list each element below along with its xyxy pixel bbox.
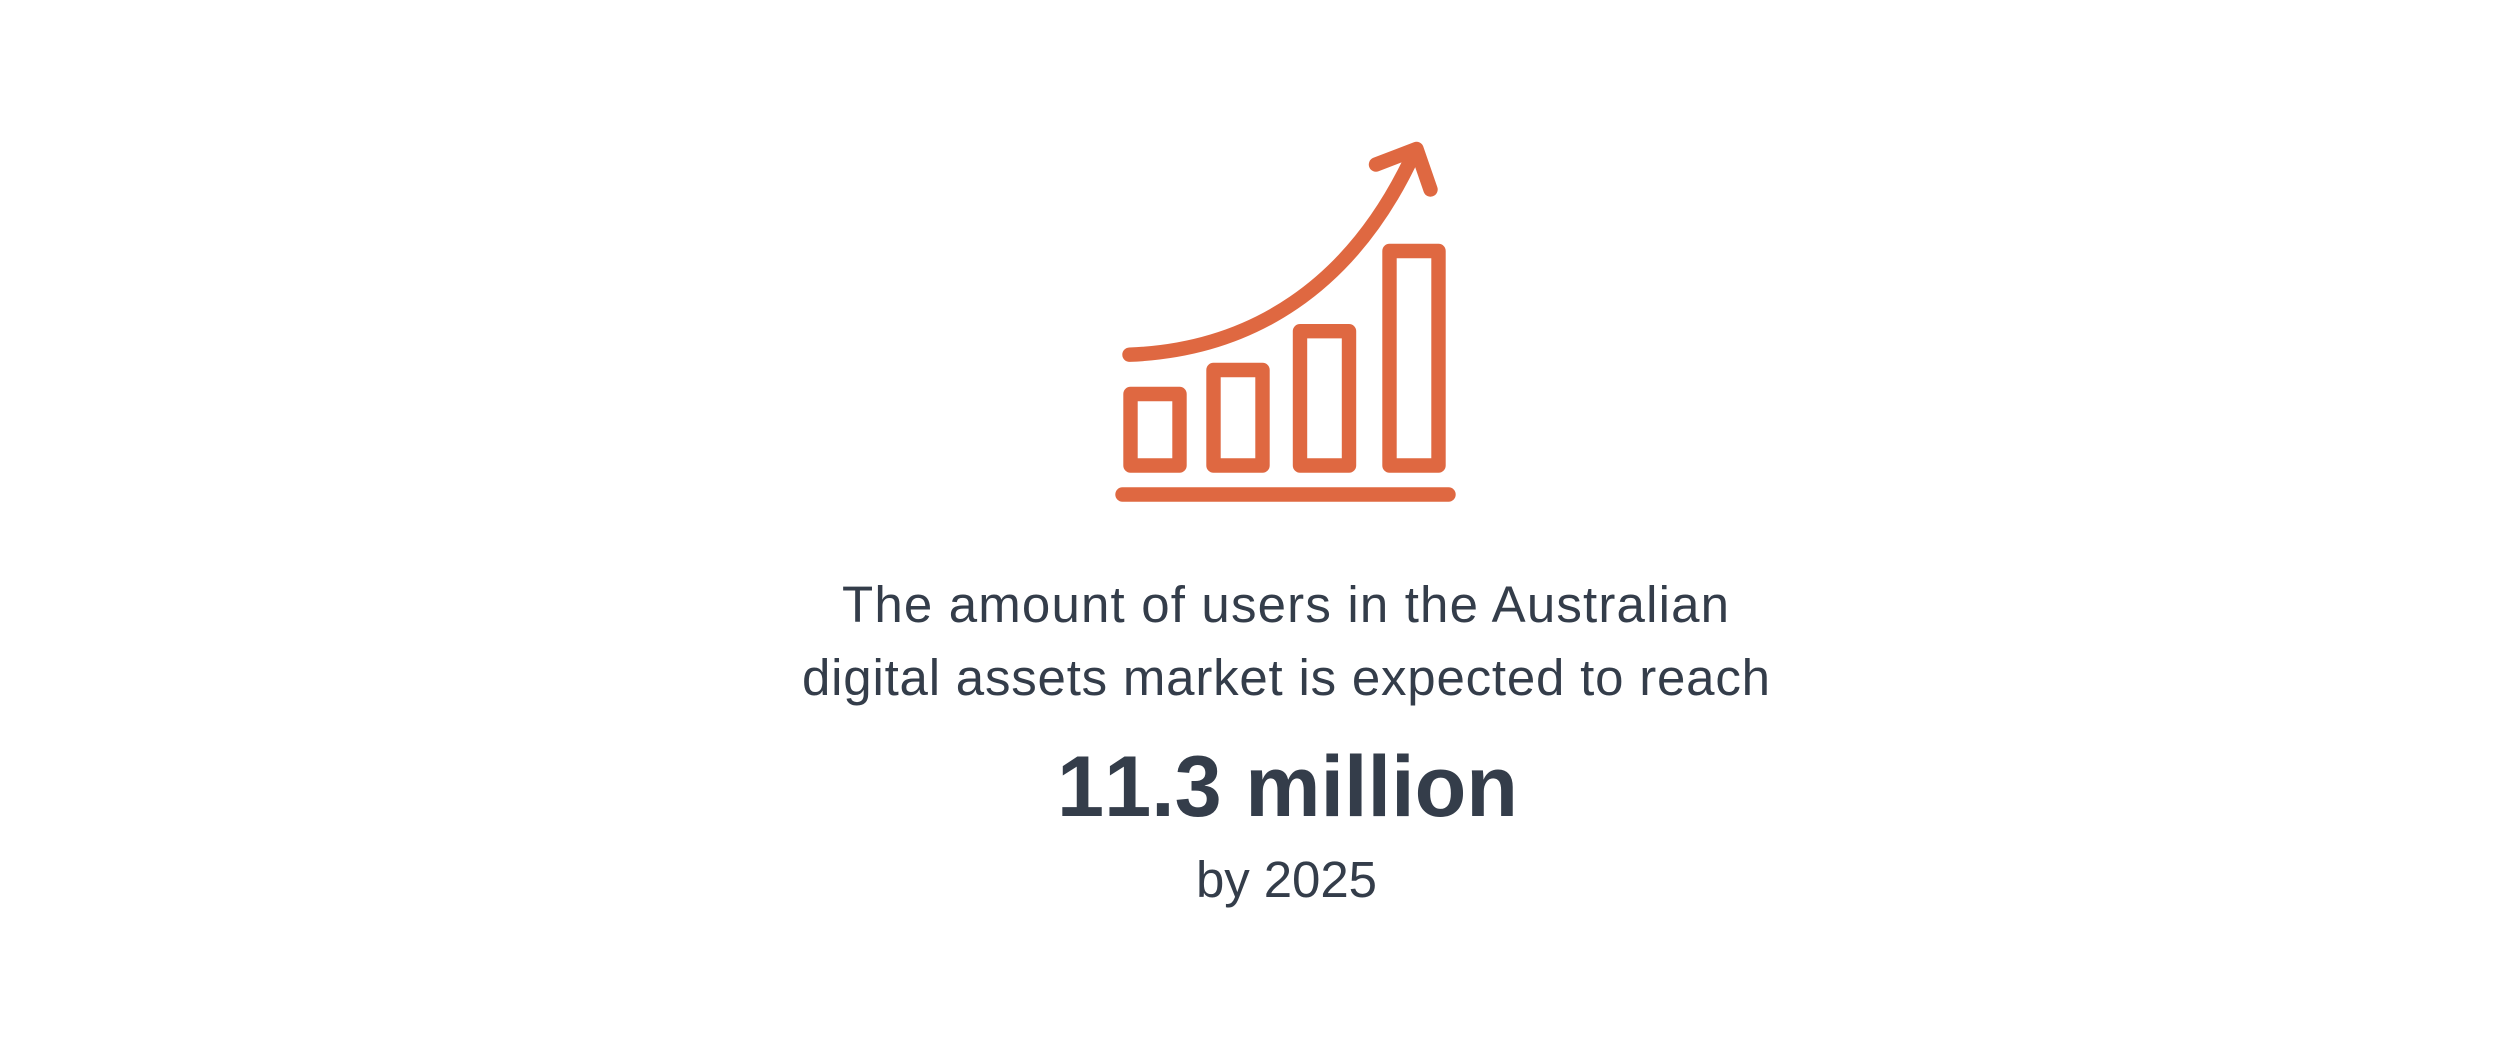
icon: rising bar chart with arrow — [1122, 149, 1448, 494]
icon: growth arrow — [1130, 149, 1430, 355]
text: description line 1: The amount of users in the Australian — [842, 576, 1729, 633]
text: year: by 2025 — [1196, 851, 1377, 908]
text: description line 2: digital assets market is expected to reach — [802, 649, 1770, 706]
text: key figure: 11.3 million — [1057, 739, 1518, 835]
icon: bar 4 — [1390, 251, 1438, 466]
text: description — [802, 576, 1770, 706]
icon: bar 3 — [1300, 331, 1349, 466]
icon: baseline — [1122, 487, 1448, 502]
icon: bar 2 — [1214, 370, 1262, 466]
icon: bar 1 — [1130, 394, 1180, 466]
